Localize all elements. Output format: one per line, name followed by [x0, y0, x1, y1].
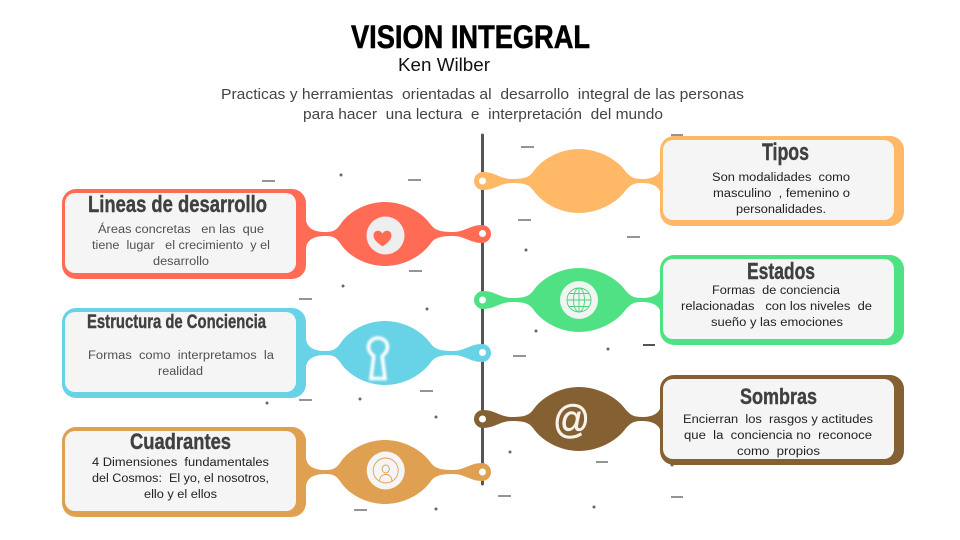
body text: 4 Dimensiones fundamentales	[92, 457, 269, 469]
panel: Cuadrantes	[62, 427, 491, 517]
body text	[681, 285, 872, 329]
body text: Formas de conciencia	[712, 285, 841, 297]
heading: Tipos	[762, 139, 809, 166]
body text: Encierran los rasgos y actitudes	[683, 414, 873, 426]
panel: Tipos	[474, 136, 904, 226]
body text: sueño y las emociones	[711, 317, 843, 329]
central timeline	[481, 135, 484, 484]
subtitle: para hacer una lectura e interpretación del mundo	[303, 107, 663, 123]
body text: realidad	[158, 366, 203, 378]
heading: Lineas de desarrollo	[88, 191, 267, 217]
panel: Sombras	[474, 375, 904, 465]
body text: relacionadas con los niveles de	[681, 301, 872, 313]
icon: keyhole	[368, 338, 388, 378]
heading: Sombras	[740, 384, 817, 409]
subtitle: Practicas y herramientas orientadas al desarrollo integral de las personas	[221, 87, 744, 103]
body text: como propios	[737, 446, 820, 458]
body text: que la conciencia no reconoce	[684, 430, 872, 442]
panel: Lineas de desarrollo	[62, 189, 491, 279]
body text	[712, 172, 850, 216]
body text: Son modalidades como	[712, 172, 850, 184]
heading: Estados	[747, 258, 815, 284]
author: Ken Wilber	[398, 55, 490, 75]
body text: del Cosmos: El yo, el nosotros,	[92, 473, 269, 485]
body text	[92, 457, 269, 501]
title: VISION INTEGRAL	[351, 19, 590, 55]
panel: Estructura de Conciencia	[62, 308, 491, 398]
body text	[92, 223, 270, 268]
body text: Formas como interpretamos la	[88, 350, 275, 362]
body text: Áreas concretas en las que	[98, 223, 264, 236]
icon: person	[367, 452, 405, 490]
panel: Estados	[474, 255, 904, 345]
icon: heart	[366, 216, 404, 254]
subtitle	[221, 87, 744, 123]
body text	[88, 350, 275, 378]
body text: masculino , femenino o	[713, 188, 850, 200]
decorative dashes and dots	[262, 135, 683, 510]
body text	[683, 414, 873, 458]
heading: Estructura de Conciencia	[87, 311, 266, 333]
body text: personalidades.	[736, 204, 826, 216]
icon: globe	[560, 281, 598, 319]
body text: desarrollo	[153, 256, 209, 268]
heading: Cuadrantes	[130, 429, 231, 454]
body text: ello y el ellos	[144, 489, 217, 501]
icon: at sign: @	[553, 398, 590, 442]
body text: tiene lugar el crecimiento y el	[92, 240, 270, 252]
